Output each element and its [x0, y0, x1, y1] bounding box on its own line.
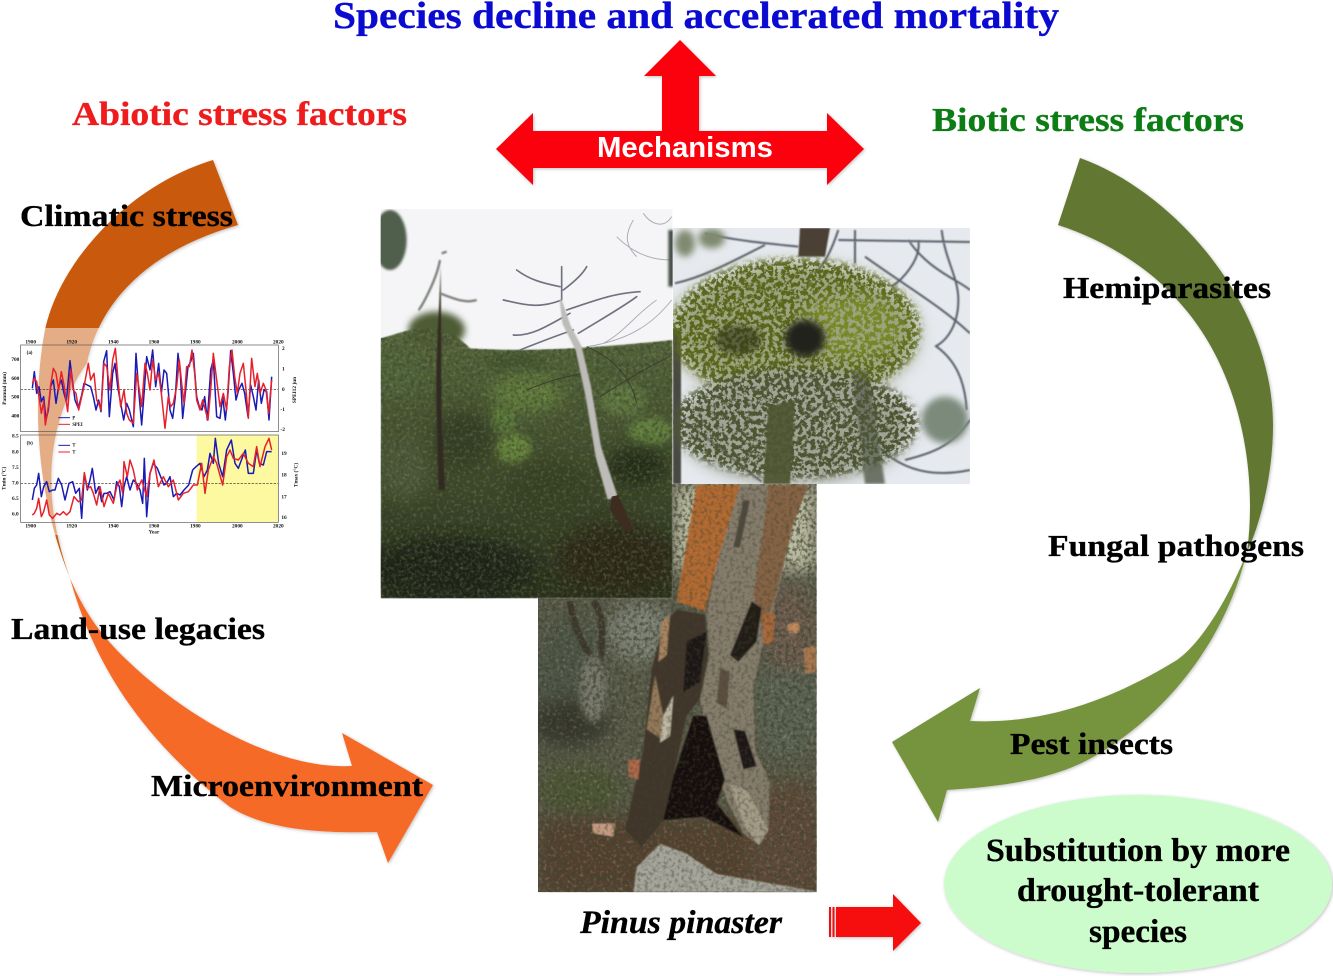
chart axis labels: 1900 — [25, 340, 36, 346]
callout text: species — [1089, 914, 1187, 950]
mistletoe foliage — [670, 258, 920, 478]
chart axis labels: SPEI12 jun — [292, 377, 298, 403]
chart axis labels: Year — [149, 530, 160, 536]
chart axis labels: 7.0 — [12, 480, 19, 486]
callout: substitution by more drought-tolerant species — [944, 795, 1332, 973]
label: fungal pathogens: Fungal pathogens — [1048, 528, 1304, 563]
chart axis labels: 500 — [11, 395, 20, 401]
chart axis labels: 1940 — [108, 340, 119, 346]
label: hemiparasites: Hemiparasites — [1063, 270, 1271, 305]
chart legends: (a) — [27, 351, 33, 356]
chart legends: (b) — [27, 441, 33, 446]
chart axis labels: 600 — [11, 376, 20, 382]
photo: declining pine in forest — [363, 209, 677, 603]
chart axis labels: Pannual (mm) — [1, 372, 8, 405]
heading: abiotic stress factors: Abiotic stress factors — [72, 96, 407, 133]
chart axis labels: 1980 — [190, 340, 201, 346]
mistletoe base tone — [672, 263, 918, 483]
chart axis labels: 2020 — [273, 340, 284, 346]
chart axis labels: Tmin (°C) — [0, 466, 7, 490]
callout text: Substitution by more — [986, 833, 1290, 869]
chart axis labels: 400 — [11, 414, 20, 420]
chart axis labels: 2000 — [232, 523, 243, 529]
chart axis labels — [0, 340, 299, 536]
chart axis labels: 17 — [281, 494, 287, 500]
arrow: red arrow to substitution — [829, 894, 921, 951]
label: microenvironment: Microenvironment — [151, 768, 424, 803]
chart axis labels: 6.5 — [12, 496, 19, 502]
callout text: drought-tolerant — [1017, 873, 1259, 909]
label: species name Pinus pinaster: Pinus pinaster — [579, 905, 783, 941]
chart axis labels: 1940 — [108, 523, 119, 529]
label: mechanisms: Mechanisms — [597, 132, 773, 164]
chart legends: P — [72, 416, 75, 421]
chart axis labels: 700 — [11, 357, 20, 363]
chart axis labels: 1 — [282, 367, 285, 373]
label: climatic stress: Climatic stress — [20, 198, 233, 233]
chart axis labels: -1 — [280, 407, 285, 413]
chart axis labels: 1920 — [66, 523, 77, 529]
chart axis labels: 2 — [282, 346, 285, 352]
arrow: mechanisms cross arrow — [496, 40, 864, 185]
chart legends: T — [72, 450, 76, 455]
photo: trunk of Pinus pinaster — [530, 484, 820, 896]
label: pest insects: Pest insects — [1010, 726, 1173, 761]
chart legends: T — [72, 444, 76, 449]
arrow: abiotic curved arrow — [38, 160, 433, 863]
chart lines: panel b — [32, 438, 272, 518]
chart axis labels: 8.0 — [12, 449, 19, 455]
chart axis labels: 0 — [282, 387, 285, 393]
arrow: biotic curved arrow — [892, 158, 1273, 822]
chart axis labels: 2020 — [273, 523, 284, 529]
chart axis labels: 1980 — [190, 523, 201, 529]
chart axis labels: -2 — [280, 427, 285, 433]
chart axis labels: 18 — [281, 472, 287, 478]
chart legends: SPEI — [72, 423, 83, 428]
chart axis labels: Tmax (°C) — [292, 463, 299, 487]
chart axis labels: 1920 — [66, 340, 77, 346]
chart: precipitation and temperature time series — [0, 328, 305, 536]
label: land-use legacies: Land-use legacies — [11, 611, 265, 646]
callout text — [986, 833, 1290, 950]
chart axis labels: 8.5 — [12, 434, 19, 440]
chart axis labels: 1960 — [149, 340, 160, 346]
chart lines: panel a — [32, 348, 272, 428]
chart axis labels: 16 — [281, 515, 287, 521]
chart axis labels: 1900 — [25, 523, 36, 529]
chart axis labels: 19 — [281, 451, 287, 457]
photo: mistletoe hemiparasite on pine — [670, 228, 970, 484]
chart axis labels: 1960 — [149, 523, 160, 529]
heading: biotic stress factors: Biotic stress factors — [932, 102, 1244, 139]
chart axis labels: 2000 — [232, 340, 243, 346]
chart legends — [27, 351, 83, 455]
chart axis labels: 7.5 — [12, 465, 19, 471]
chart axis labels: 6.0 — [12, 511, 19, 517]
